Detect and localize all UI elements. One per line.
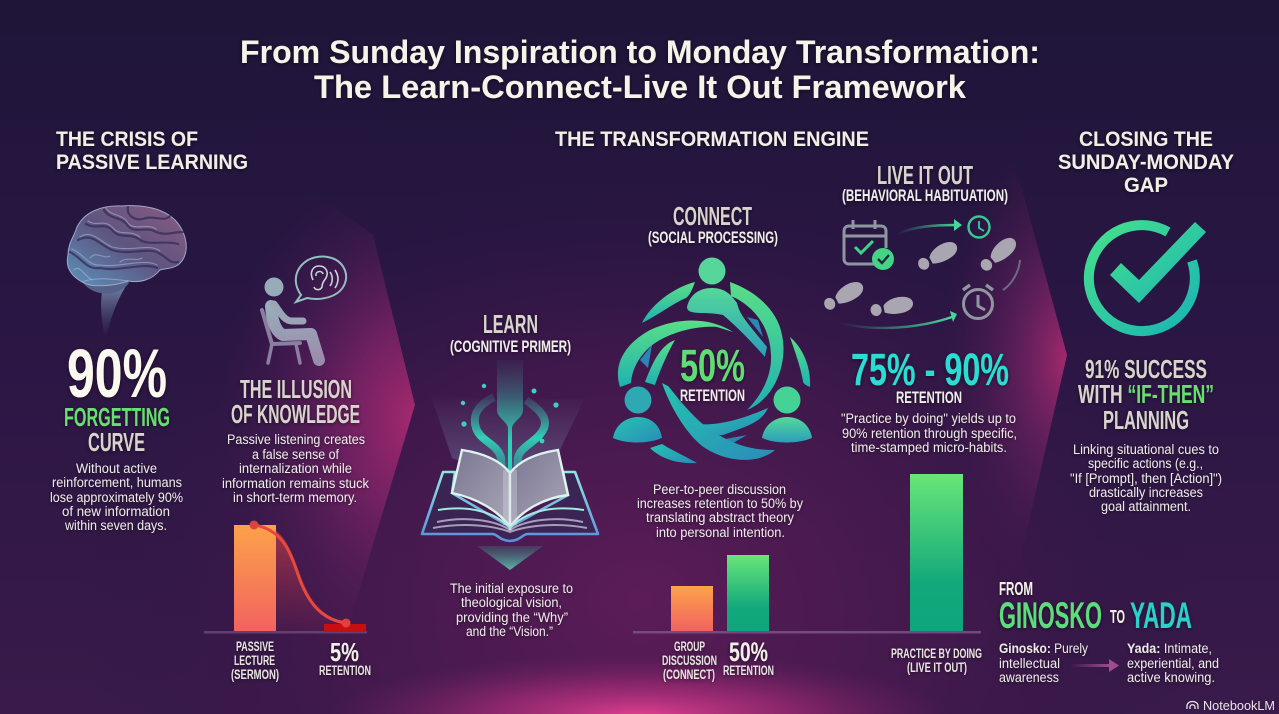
stat: 91% success with if-then planning: 91% SUCCESS [1085, 354, 1207, 384]
title: The Learn-Connect-Live It Out Framework [314, 69, 967, 105]
labels: passive lecture [231, 639, 279, 682]
text: illusion description [222, 432, 370, 506]
text: if-then description: drastically increases [1089, 485, 1203, 501]
icon: brain [67, 206, 186, 338]
heading: live it out: (BEHAVIORAL HABITUATION) [842, 187, 1008, 205]
icon: open book with light beam [422, 360, 598, 541]
text: learn description [450, 581, 573, 640]
heading: the crisis of passive learning: THE CRISIS OF [56, 127, 198, 151]
text: ginosko definition: intellectual [999, 656, 1060, 672]
labels: 5% retention: RETENTION [319, 663, 371, 678]
heading: live it out [842, 160, 1008, 205]
arrow: ginosko to yada [1070, 659, 1119, 672]
stat: 50% retention [680, 340, 745, 405]
text: live it out description [841, 411, 1017, 456]
heading: from ginosko to yada: TO [1110, 607, 1125, 627]
text: yada definition [1127, 641, 1219, 686]
text: if-then description: goal attainment. [1101, 499, 1191, 515]
labels: practice by doing [891, 646, 982, 675]
labels: 5% retention: 5% [330, 637, 359, 667]
text: yada definition: experiential, and [1127, 656, 1219, 672]
text: if-then description [1070, 442, 1222, 515]
text: live it out description: "Practice by doing" yields up to [841, 411, 1016, 427]
stat: 75% - 90% retention: 75% - 90% [851, 344, 1009, 395]
heading: closing the sunday-monday gap: SUNDAY-MONDAY [1058, 150, 1234, 174]
text: forgetting curve description: within seven days. [64, 518, 167, 534]
stat: 90% forgetting curve [64, 335, 170, 457]
labels: group discussion: GROUP [674, 639, 705, 654]
labels: 50% retention: RETENTION [723, 663, 774, 678]
labels: group discussion [662, 639, 717, 682]
curve: forgetting drop [250, 520, 350, 628]
stat: 90% forgetting curve: 90% [67, 335, 167, 412]
text: forgetting curve description: Without active [76, 461, 157, 477]
labels: group discussion: (CONNECT) [663, 667, 715, 682]
icon: habit calendar, clocks and footsteps [821, 216, 1020, 328]
bar: group discussion orange [671, 586, 713, 631]
text: forgetting curve description [50, 461, 183, 534]
heading: from ginosko to yada [999, 579, 1192, 636]
heading: learn [450, 309, 571, 356]
heading: learn: LEARN [483, 309, 538, 339]
labels: 5% retention [319, 637, 371, 678]
text: connect description: into personal intention. [656, 525, 785, 541]
text: forgetting curve description: reinforcement, humans [52, 475, 182, 491]
text: illusion description: internalization while [239, 461, 352, 477]
stat: 50% retention: 50% [680, 340, 745, 391]
stat: 91% success with if-then planning: PLANNING [1103, 405, 1189, 435]
heading: from ginosko to yada: FROM [999, 579, 1033, 599]
labels: group discussion: DISCUSSION [662, 653, 717, 668]
text: if-then description: specific actions (e.g., [1088, 456, 1203, 472]
text: yada definition: active knowing. [1127, 670, 1215, 686]
heading: the crisis of passive learning: PASSIVE LEARNING [56, 150, 248, 174]
text: if-then description: Linking situational cues to [1073, 442, 1219, 458]
heading: the illusion of knowledge: OF KNOWLEDGE [231, 399, 360, 429]
title [240, 34, 1040, 105]
stat: 90% forgetting curve: CURVE [88, 427, 145, 457]
stat: 91% success with if-then planning [1078, 354, 1214, 435]
text: learn description: The initial exposure to [450, 581, 573, 597]
text: live it out description: time-stamped micro-habits. [851, 440, 1007, 456]
heading: learn: (COGNITIVE PRIMER) [450, 338, 571, 356]
text: learn description: and the “Vision.” [466, 624, 553, 640]
heading: the illusion of knowledge [231, 374, 360, 429]
stat: 50% retention: RETENTION [680, 387, 745, 405]
text: illusion description: a false sense of [252, 447, 339, 463]
text: connect description: Peer-to-peer discussion [653, 482, 786, 498]
heading: closing the sunday-monday gap: CLOSING THE [1079, 127, 1213, 151]
heading: connect: (SOCIAL PROCESSING) [648, 229, 778, 247]
text: ginosko definition: awareness [999, 670, 1059, 686]
text: if-then description: "If [Prompt], then [Action]") [1070, 471, 1222, 487]
heading: closing the sunday-monday gap [1058, 127, 1234, 197]
heading: the crisis of passive learning [56, 127, 248, 174]
heading: connect: CONNECT [673, 201, 752, 231]
text: live it out description: 90% retention through specific, [842, 426, 1017, 442]
text: forgetting curve description: of new information [62, 504, 170, 520]
text: connect description [637, 482, 804, 541]
text: learn description: providing the “Why” [456, 610, 568, 626]
heading: from ginosko to yada: YADA [1130, 595, 1192, 636]
text: illusion description: Passive listening creates [227, 432, 365, 448]
labels: passive lecture: LECTURE [234, 653, 275, 668]
text: forgetting curve description: lose approximately 90% [50, 490, 183, 506]
bar: practice by doing [910, 474, 963, 631]
chart: group discussion and practice by doing bars [633, 474, 981, 634]
labels: passive lecture: PASSIVE [236, 639, 274, 654]
stat: 90% forgetting curve: FORGETTING [64, 402, 170, 432]
stat: 75% - 90% retention [851, 344, 1009, 407]
heading: from ginosko to yada: GINOSKO [999, 595, 1102, 636]
heading: closing the sunday-monday gap: GAP [1124, 173, 1168, 197]
logo: notebooklm: NotebookLM [1203, 699, 1275, 713]
title: From Sunday Inspiration to Monday Transformation: [240, 34, 1040, 70]
labels: 50% retention: 50% [729, 637, 768, 667]
bar: 5% retention [324, 624, 366, 632]
labels: practice by doing: (LIVE IT OUT) [907, 660, 967, 675]
text: ginosko definition: Ginosko: Purely [999, 641, 1089, 657]
bar: passive lecture [234, 525, 276, 631]
text: connect description: translating abstract theory [646, 510, 795, 526]
labels: practice by doing: PRACTICE BY DOING [891, 646, 982, 661]
heading: the illusion of knowledge: THE ILLUSION [240, 374, 352, 404]
icon: seated listener with ear bubble [262, 257, 346, 363]
heading: live it out: LIVE IT OUT [877, 160, 973, 190]
icon: chevron down [477, 546, 543, 570]
text: ginosko definition [999, 641, 1089, 686]
text: learn description: theological vision, [461, 595, 562, 611]
stat: 91% success with if-then planning: WITH “IF-THEN” [1078, 379, 1214, 409]
text: illusion description: information remains stuck [222, 476, 370, 492]
text: illusion description: in short-term memory. [233, 490, 357, 506]
icon: connected people trefoil [613, 258, 812, 463]
labels: passive lecture: (SERMON) [231, 667, 279, 682]
text: yada definition: Yada: Intimate, [1127, 641, 1212, 657]
stat: 75% - 90% retention: RETENTION [896, 389, 962, 407]
bar: group discussion green [727, 555, 769, 631]
heading: connect [648, 201, 778, 247]
chart: passive lecture vs retention [204, 520, 367, 634]
icon: check mark in ring [1089, 222, 1206, 331]
labels: 50% retention [723, 637, 774, 678]
text: connect description: increases retention to 50% by [637, 496, 804, 512]
heading: the transformation engine: THE TRANSFORMATION ENGINE [555, 127, 869, 151]
